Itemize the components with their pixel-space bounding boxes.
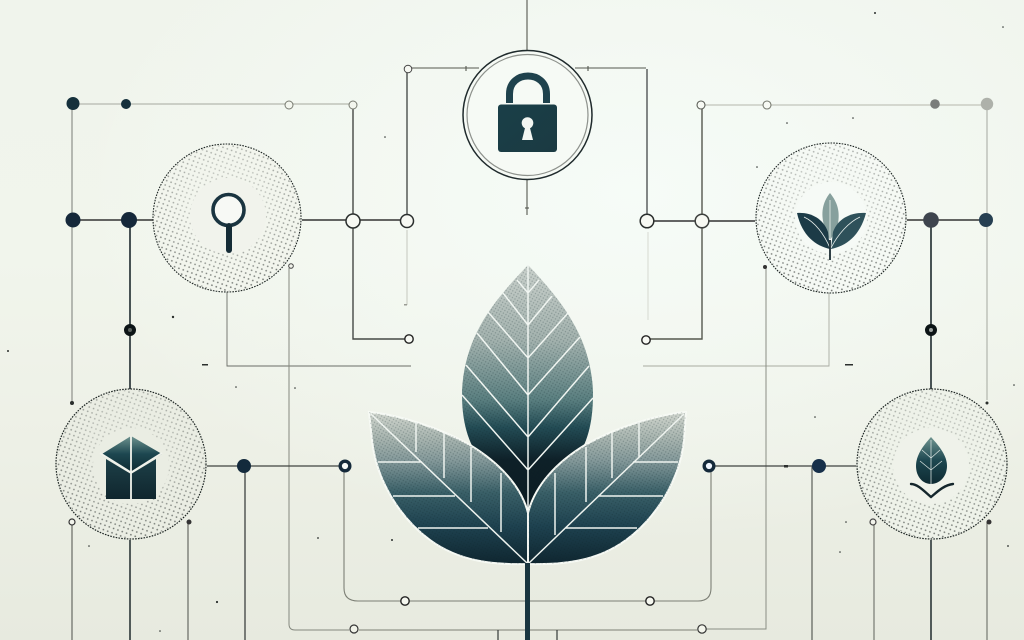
- icon: sprout leaf: [911, 437, 953, 497]
- midrib and stem: [526, 510, 529, 640]
- icon: box: [100, 436, 162, 499]
- icon: magnifying glass: [213, 194, 244, 250]
- left leaf: [369, 412, 528, 564]
- panel: box circle: [56, 389, 206, 539]
- right leaf: [528, 412, 686, 564]
- central leaf illustration: [369, 265, 686, 640]
- panel: magnifier circle: [153, 144, 301, 292]
- icon: three leaves: [797, 193, 866, 260]
- nodes: left: [66, 65, 414, 633]
- icon: padlock: [498, 76, 557, 152]
- panel: lock circle: [463, 50, 592, 180]
- connector lines: top lock: [408, 0, 646, 215]
- top leaf: [462, 265, 593, 513]
- connector lines: right network: [643, 69, 987, 640]
- nodes: right: [289, 98, 993, 633]
- connector lines: left network: [72, 69, 711, 640]
- panel: leaf trio circle: [756, 143, 906, 293]
- panel: sprout circle: [857, 389, 1007, 539]
